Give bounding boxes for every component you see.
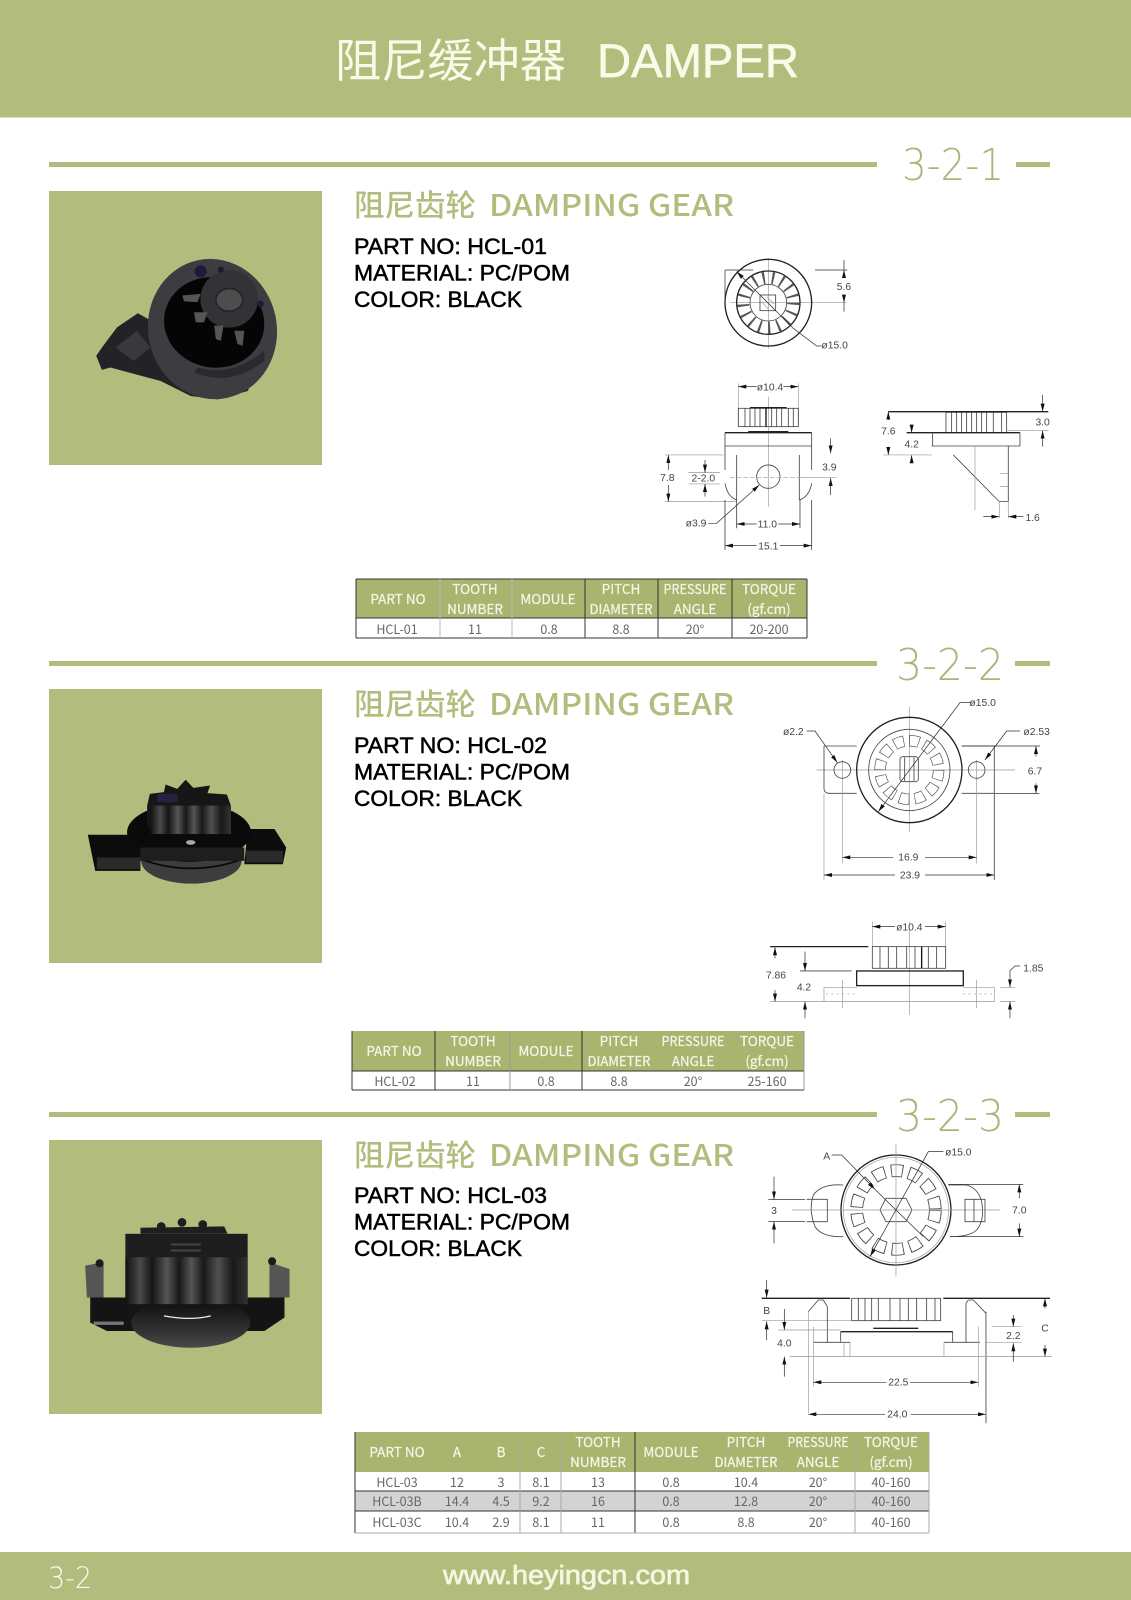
side view: 4.2 [904,440,919,451]
side view: 1.6 [1025,513,1040,524]
table: HCL-02 specs: NUMBER [445,1050,501,1070]
top view: 3 [771,1206,777,1217]
table: HCL-03 specs [355,1431,929,1533]
front view: 11.0 [758,520,777,531]
table: HCL-03 specs: HCL-03 [376,1472,418,1491]
page number: 3-2 [48,1561,92,1595]
table: HCL-02 specs: TOOTH [450,1030,496,1050]
table: HCL-02 specs: ANGLE [672,1050,714,1070]
table: HCL-03 specs: 10.4 [445,1512,469,1531]
table: HCL-03 specs: 8.1 [532,1472,550,1491]
side view: C [1041,1323,1049,1334]
top view: ø2.2 [783,727,804,738]
table: HCL-03 specs: 12.8 [734,1491,758,1510]
side view: B [763,1306,770,1317]
table: HCL-01 specs: (gf.cm) [747,598,791,618]
top view [725,258,851,352]
table: HCL-01 specs: NUMBER [447,598,503,618]
front view: ø3.9 [686,519,707,530]
table: HCL-02 specs: PRESSURE [662,1030,725,1050]
table: HCL-01 specs: PITCH [602,578,640,598]
table: HCL-01 specs: 8.8 [612,619,630,638]
heading: section 1: 阻尼齿轮 [354,181,476,225]
table: HCL-03 specs: DIAMETER [714,1451,778,1471]
title latin: DAMPER [597,34,799,87]
spec text HCL-02: COLOR: BLACK [354,786,522,811]
heading: section 3: DAMPING GEAR [489,1131,734,1175]
table: HCL-03 specs: 13 [591,1472,605,1491]
table: HCL-03 specs: 4.5 [492,1491,510,1510]
top view: 23.9 [900,871,920,882]
table: HCL-03 specs: 40-160 [871,1512,911,1531]
table: HCL-03 specs: 12 [450,1472,464,1491]
spec text HCL-01: COLOR: BLACK [354,287,522,312]
table: HCL-01 specs: 11 [468,619,482,638]
front view [660,382,837,552]
panel: product photo HCL-02 [49,689,322,963]
spec text HCL-01 [354,234,570,312]
table: HCL-03 specs: 3 [498,1472,505,1491]
front view: 2-2.0 [692,473,715,484]
table: HCL-03 specs: 0.8 [662,1512,680,1531]
table: HCL-03 specs: PART NO [369,1441,425,1461]
table: HCL-03 specs: HCL-03B [372,1491,422,1510]
table: HCL-03 specs: A [453,1441,462,1461]
table: HCL-03 specs: HCL-03C [372,1512,422,1531]
table: HCL-03 specs: B [497,1441,506,1461]
table: HCL-03 specs: 40-160 [871,1491,911,1510]
table: HCL-03 specs: TOOTH [575,1431,621,1451]
table: HCL-03 specs: TORQUE [864,1431,918,1451]
top view: 7.0 [1012,1205,1027,1216]
side view: 2.2 [1006,1331,1021,1342]
front view: 3.9 [822,463,837,474]
top view: 6.7 [1028,766,1042,777]
table: HCL-02 specs: HCL-02 [374,1071,416,1090]
icon: gear HCL-03 [85,1218,290,1348]
table: HCL-03 specs: 11 [591,1512,605,1531]
title: 阻尼缓冲器 [335,25,566,91]
table: HCL-02 specs: 25-160 [747,1071,787,1090]
table: HCL-03 specs: 8.8 [737,1512,755,1531]
spec text HCL-03: PART NO: HCL-03 [354,1183,547,1208]
spec text HCL-03: MATERIAL: PC/POM [354,1210,570,1234]
spec text HCL-03: COLOR: BLACK [354,1236,522,1261]
table: HCL-03 specs: 14.4 [445,1491,469,1510]
spec text HCL-02: MATERIAL: PC/POM [354,760,570,784]
top view: ø15.0 [969,698,996,709]
table: HCL-03 specs: 40-160 [871,1472,911,1491]
chart: technical drawing HCL-03 [762,1143,1052,1423]
top view: ø15.0 [821,341,848,352]
front view: ø10.4 [757,382,783,393]
table: HCL-03 specs: 8.1 [532,1512,550,1531]
top view: A [823,1151,830,1162]
table: HCL-03 specs: 20° [809,1512,828,1531]
table: HCL-02 specs: (gf.cm) [745,1050,789,1070]
side view: 3.0 [1035,417,1050,428]
side view: ø10.4 [896,923,923,934]
table: HCL-02 specs: MODULE [518,1040,574,1060]
section 2 rule and number [49,640,1050,691]
table: HCL-03 specs: 20° [809,1472,828,1491]
side view: 22.5 [888,1378,909,1389]
side view: 24.0 [887,1410,908,1421]
spec text HCL-01: MATERIAL: PC/POM [354,260,570,286]
table: HCL-01 specs: ANGLE [674,598,716,618]
icon: gear HCL-02 [88,780,286,884]
panel: product photo HCL-01 [49,191,322,465]
top view: 5.6 [837,282,851,293]
table: HCL-02 specs: 11 [466,1071,480,1090]
top view: 16.9 [898,853,919,864]
heading: section 1: DAMPING GEAR [489,181,734,225]
table: HCL-01 specs: TOOTH [452,578,498,598]
spec text HCL-03 [354,1183,570,1261]
heading: section 2: 阻尼齿轮 [354,680,476,724]
website: www.heyingcn.com [442,1562,690,1590]
table: HCL-01 specs: PRESSURE [664,578,727,598]
table: HCL-01 specs: 20-200 [749,619,789,638]
table: HCL-02 specs: TORQUE [740,1030,794,1050]
table: HCL-01 specs: MODULE [520,588,576,608]
header band [0,0,1131,118]
table: HCL-03 specs: 0.8 [662,1491,680,1510]
spec text HCL-02: PART NO: HCL-02 [354,733,547,758]
table: HCL-02 specs: 20° [684,1071,703,1090]
top view [783,698,1050,882]
table: HCL-03 specs: PRESSURE [788,1431,849,1451]
icon: gear HCL-01 [96,247,290,411]
table: HCL-01 specs: 20° [686,619,705,638]
table: HCL-03 specs: 16 [591,1491,605,1510]
table: HCL-01 specs: TORQUE [742,578,796,598]
spec text HCL-02 [354,733,570,811]
table: HCL-01 specs [356,578,807,638]
table: HCL-01 specs: PART NO [370,588,426,608]
side view: 1.85 [1023,963,1044,974]
table: HCL-02 specs: 0.8 [537,1071,555,1090]
table: HCL-03 specs: 9.2 [532,1491,550,1510]
top view: ø2.53 [1023,727,1050,738]
heading: section 3: 阻尼齿轮 [354,1131,476,1175]
table: HCL-03 specs: 20° [809,1491,828,1510]
section 2 rule and number: 3-2-2 [896,640,1004,691]
table: HCL-02 specs: PART NO [366,1040,422,1060]
top view: ø15.0 [945,1148,972,1159]
table: HCL-03 specs: C [537,1441,546,1461]
heading: section 2: DAMPING GEAR [489,680,734,724]
table: HCL-02 specs [352,1030,804,1090]
spec text HCL-01: PART NO: HCL-01 [354,234,547,259]
panel: product photo HCL-03 [49,1140,322,1414]
section 3 rule and number [49,1091,1050,1142]
section 1 rule and number: 3-2-1 [902,140,1004,191]
section 1 rule and number [49,140,1050,191]
front view: 15.1 [758,541,779,552]
table: HCL-02 specs: PITCH [600,1030,638,1050]
table: HCL-01 specs: 0.8 [540,619,558,638]
table: HCL-03 specs: 0.8 [662,1472,680,1491]
side view: 7.6 [881,427,896,438]
chart: technical drawing HCL-01 [660,258,1050,552]
chart: technical drawing HCL-02 [766,698,1050,1018]
footer band [0,1552,1131,1600]
table: HCL-01 specs: DIAMETER [590,598,653,618]
side view [766,922,1044,1018]
table: HCL-02 specs: DIAMETER [588,1050,651,1070]
table: HCL-03 specs: MODULE [643,1441,699,1461]
top view [768,1143,1027,1277]
front view: 7.8 [660,473,675,484]
side view: 4.0 [777,1339,792,1350]
side view: 7.86 [766,970,786,981]
table: HCL-03 specs: (gf.cm) [869,1451,913,1471]
side view [762,1280,1052,1423]
table: HCL-03 specs: PITCH [727,1431,765,1451]
table: HCL-02 specs: 8.8 [610,1071,628,1090]
section 3 rule and number: 3-2-3 [896,1091,1004,1142]
side view: 4.2 [797,983,811,994]
table: HCL-03 specs: NUMBER [570,1451,626,1471]
table: HCL-03 specs: 10.4 [734,1472,758,1491]
table: HCL-01 specs: HCL-01 [376,619,418,638]
side view [881,395,1050,524]
table: HCL-03 specs: ANGLE [797,1451,839,1471]
table: HCL-03 specs: 2.9 [492,1512,510,1531]
